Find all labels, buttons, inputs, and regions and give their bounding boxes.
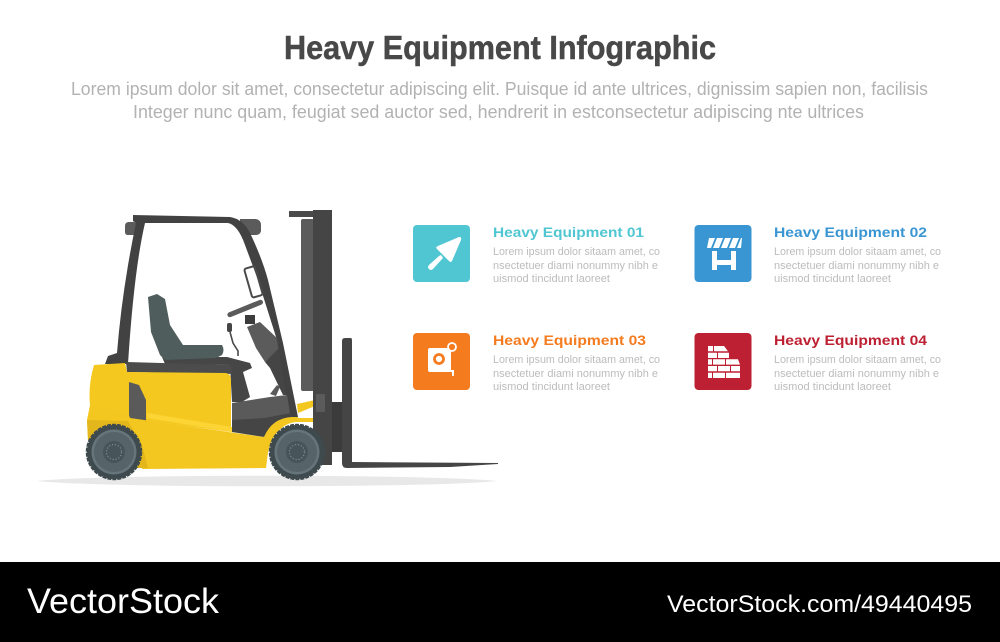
subtitle text: Lorem ipsum dolor sit amet, consectetur adipiscing elit. Puisque id ante ultrices, dignissim sapien non, facilisis — [71, 79, 928, 99]
body text 02 — [774, 246, 941, 285]
item 04 — [694, 332, 941, 393]
item 02 — [694, 224, 941, 285]
body text 04: nsectetuer diami nonummy nibh e — [774, 368, 939, 380]
body text 03: nsectetuer diami nonummy nibh e — [493, 368, 658, 380]
body text 02: uismod tincidunt laoreet — [774, 273, 891, 285]
front yellow supports — [297, 400, 315, 413]
body text 03: Lorem ipsum dolor sitaam amet, co — [493, 354, 660, 366]
body text 03: uismod tincidunt laoreet — [493, 381, 610, 393]
subtitle text — [71, 79, 928, 122]
body text 03 — [493, 354, 660, 393]
body text 02: nsectetuer diami nonummy nibh e — [774, 260, 939, 272]
body — [87, 362, 313, 469]
body text 02: Lorem ipsum dolor sitaam amet, co — [774, 246, 941, 258]
rear wheel — [87, 425, 141, 479]
heading 01: Heavy Equipment 01 — [493, 224, 644, 240]
body text 01: uismod tincidunt laoreet — [493, 273, 610, 285]
body text 01: Lorem ipsum dolor sitaam amet, co — [493, 246, 660, 258]
body text 04: Lorem ipsum dolor sitaam amet, co — [774, 354, 941, 366]
icon: trowel — [413, 225, 470, 282]
heading 03: Heavy Equipment 03 — [493, 332, 646, 348]
floor and pedal — [232, 385, 293, 437]
footer bar — [0, 562, 1000, 642]
cab frame — [105, 215, 298, 417]
seat — [148, 294, 252, 402]
icon: tape measure — [413, 333, 470, 390]
item 01 — [413, 224, 660, 285]
steering column — [227, 299, 292, 395]
body text 01: nsectetuer diami nonummy nibh e — [493, 260, 658, 272]
forklift illustration — [87, 210, 498, 479]
ground shadow — [37, 476, 497, 486]
item 03 — [413, 332, 660, 393]
footer logo: VectorStock — [27, 582, 220, 621]
body text 04: uismod tincidunt laoreet — [774, 381, 891, 393]
body text 01 — [493, 246, 660, 285]
icon: barrier — [694, 225, 752, 282]
body text 04 — [774, 354, 941, 393]
heading 04: Heavy Equipment 04 — [774, 332, 927, 348]
footer url: VectorStock.com/49440495 — [667, 591, 972, 618]
mast — [289, 210, 343, 465]
title: Heavy Equipment Infographic — [284, 29, 716, 66]
front wheel — [270, 425, 324, 479]
subtitle text: Integer nunc quam, feugiat sed auctor sed, hendrerit in estconsectetur adipiscing nte ultrices — [133, 102, 864, 122]
fork — [342, 338, 498, 468]
icon: brick wall — [694, 333, 752, 390]
heading 02: Heavy Equipment 02 — [774, 224, 927, 240]
